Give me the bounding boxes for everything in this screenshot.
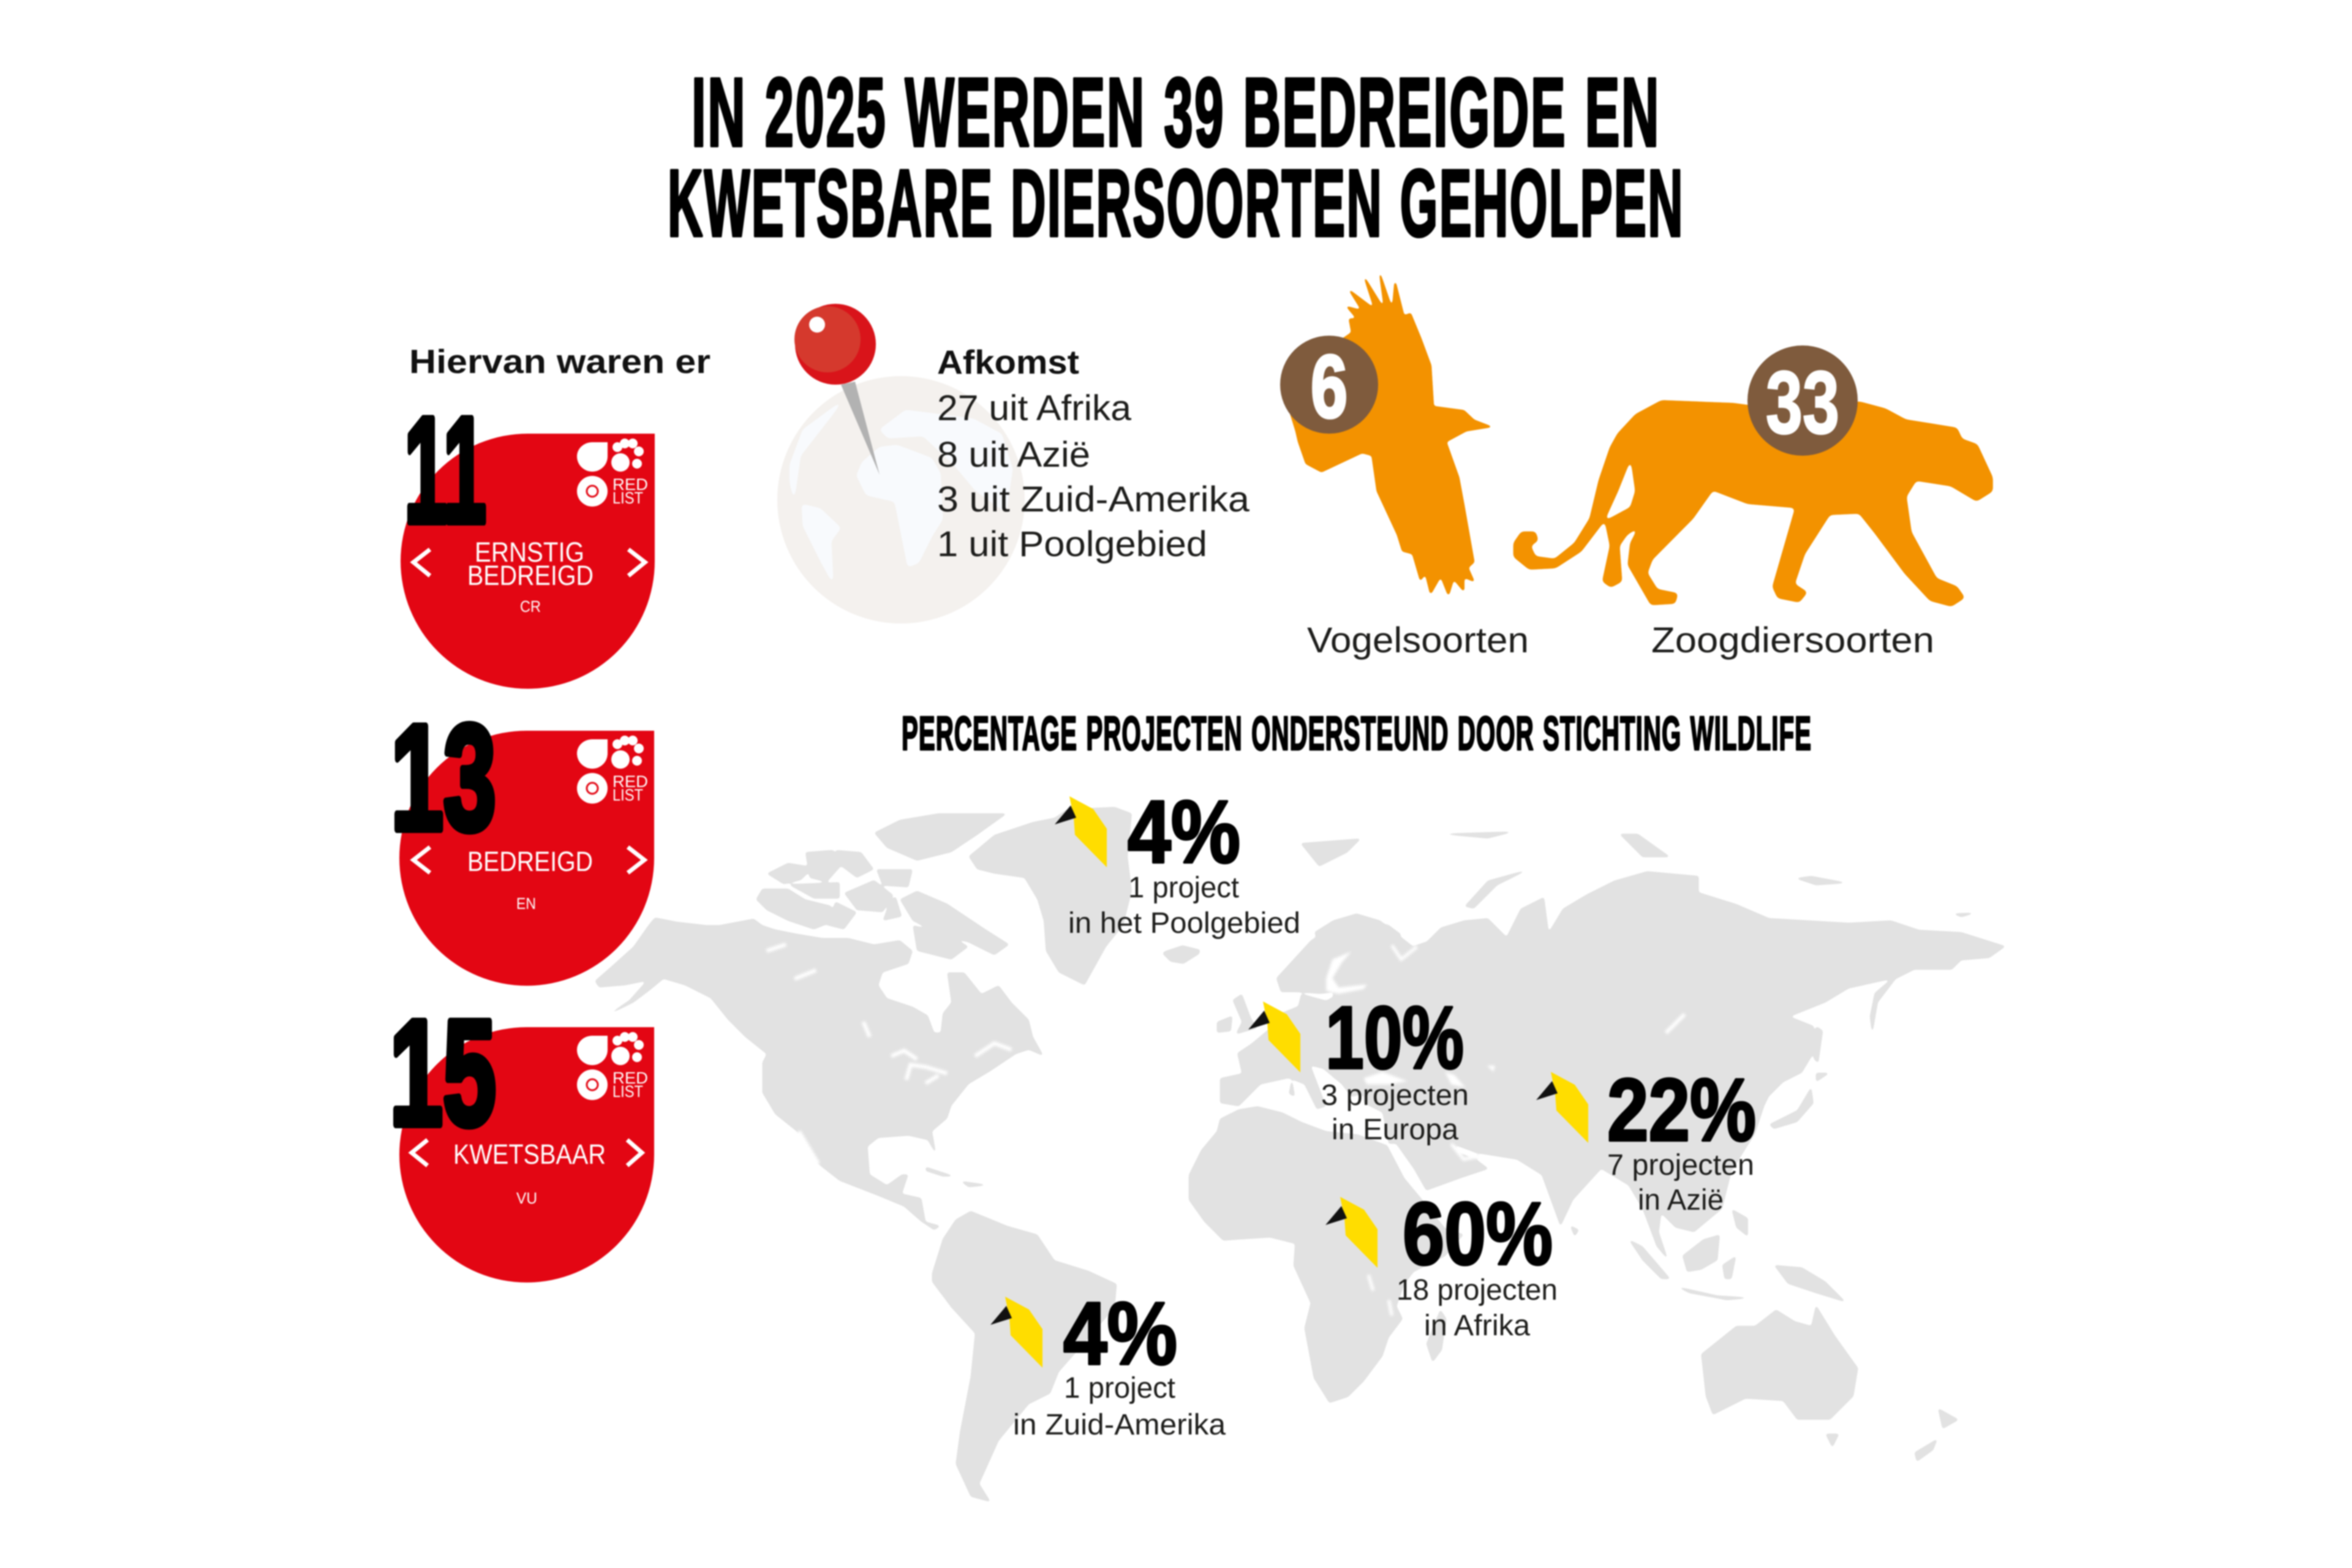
callout: Africa: in Afrika [1424, 1310, 1530, 1342]
status label: CR [520, 597, 541, 616]
callout: Polar region: 4% [1128, 782, 1240, 881]
map: Americas and Greenland [595, 807, 1200, 1502]
red list logo: LIST [612, 786, 643, 804]
origin text block: Afkomst [937, 343, 1079, 381]
red list logo [577, 439, 648, 507]
origin text block: 8 uit Azië [937, 435, 1090, 475]
title [668, 58, 1684, 256]
callout: Asia: 22% [1607, 1060, 1756, 1159]
right arrow [628, 549, 645, 576]
badge: critically endangered [401, 386, 655, 688]
red list logo: RED [612, 1069, 648, 1087]
icon: bird marker [1536, 1072, 1588, 1143]
status label: BEDREIGD [467, 560, 594, 591]
map: inland seas [1326, 945, 1495, 1316]
world map [595, 807, 2006, 1502]
callout: Asia [1536, 1060, 1756, 1216]
icon: big cat silhouette with count [1515, 345, 1992, 606]
callout: Europe: 3 projecten [1321, 1079, 1469, 1112]
status label [453, 1139, 606, 1207]
left arrow [413, 549, 430, 576]
callout: South America: in Zuid-Amerika [1013, 1409, 1226, 1441]
icon: big cat silhouette with count: 33 [1766, 353, 1839, 452]
number 11: 11 [404, 386, 486, 554]
callout: South America: 4% [1063, 1284, 1177, 1383]
origin text block: 27 uit Afrika [937, 388, 1132, 428]
callout: South America: 1 project [1064, 1372, 1175, 1404]
label: mammal species: Zoogdiersoorten [1651, 620, 1934, 660]
status label: KWETSBAAR [453, 1139, 606, 1170]
red list logo: RED [612, 772, 648, 791]
left arrow [413, 847, 430, 873]
map: Asia and Oceania [1300, 831, 2006, 1462]
label: bird species: Vogelsoorten [1307, 620, 1529, 660]
right arrow [627, 1140, 642, 1166]
callout: Asia: 7 projecten [1607, 1149, 1754, 1182]
origin text block: 3 uit Zuid-Amerika [937, 480, 1250, 519]
red list logo: LIST [612, 489, 643, 507]
callout: Africa: 60% [1403, 1184, 1553, 1283]
red list logo: RED [612, 475, 648, 494]
callout: Africa [1325, 1184, 1558, 1342]
number 15: 15 [390, 989, 496, 1156]
badge: endangered [391, 693, 654, 986]
origin text block: 1 uit Poolgebied [937, 524, 1207, 564]
origin text block [937, 343, 1250, 564]
icon: map pin [794, 304, 880, 475]
status label: BEDREIGD [467, 846, 593, 877]
red list logo [577, 736, 648, 804]
callout: Asia: in Azië [1638, 1184, 1724, 1216]
icon: bird silhouette with count: 6 [1311, 337, 1348, 436]
icon: bird marker [1325, 1197, 1378, 1268]
callout: Europe: 10% [1325, 988, 1464, 1087]
left arrow [412, 1140, 428, 1166]
callout: Europe: in Europa [1332, 1114, 1458, 1146]
number 13: 13 [391, 693, 496, 861]
callout: Polar region: 1 project [1128, 872, 1239, 904]
right arrow [628, 847, 644, 873]
status label [467, 846, 593, 913]
callout: Polar region [1055, 782, 1300, 940]
status label [467, 537, 594, 616]
red list logo: LIST [612, 1082, 643, 1101]
callout: Polar region: in het Poolgebied [1068, 907, 1300, 940]
callout: South America [990, 1284, 1226, 1441]
callout: Africa: 18 projecten [1396, 1274, 1558, 1306]
icon: bird marker [1248, 1001, 1300, 1072]
status label: ERNSTIG [475, 537, 584, 568]
icon: bird marker [1055, 796, 1107, 867]
icon: bird marker [990, 1297, 1042, 1368]
icon: globe [777, 376, 1025, 624]
map: Europe and Africa [1164, 919, 1507, 1403]
intro label: Hiervan waren er [409, 342, 710, 380]
icon: bird silhouette with count [1280, 274, 1491, 595]
badge: vulnerable [390, 989, 654, 1283]
status label: EN [516, 894, 536, 913]
status label: VU [516, 1189, 537, 1207]
callout: Europe [1248, 988, 1469, 1146]
red list logo [577, 1032, 648, 1101]
